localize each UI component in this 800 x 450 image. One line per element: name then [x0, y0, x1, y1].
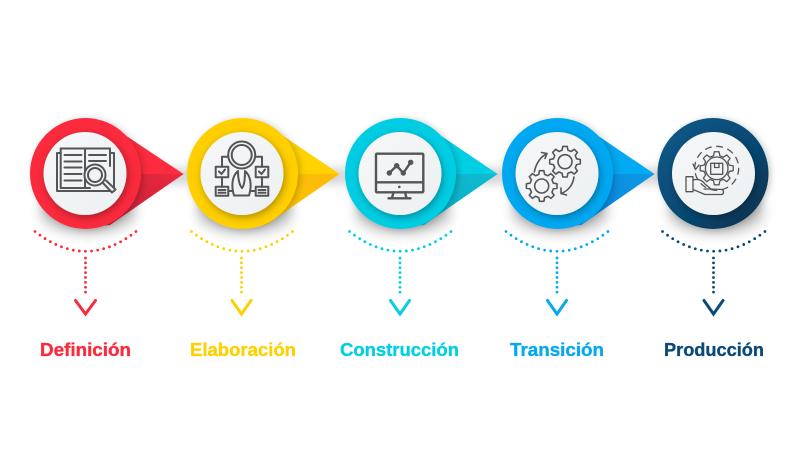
connector: Elaboración — [192, 232, 292, 314]
label: Construcción: Construcción — [340, 339, 459, 360]
soft shadows behind pins — [40, 170, 764, 234]
connector: Construcción — [350, 232, 451, 314]
pin 2: Elaboración — [187, 118, 340, 229]
pin 1: Definición — [30, 118, 184, 229]
label: Elaboración: Elaboración — [190, 339, 296, 360]
label: Transición: Transición — [510, 339, 604, 360]
connector: Transición — [506, 232, 608, 314]
pin 3: Construcción — [345, 118, 498, 229]
icon: analysis with magnifier — [216, 142, 268, 196]
pin 5: Producción — [658, 118, 768, 229]
pin 4: Transición — [502, 118, 654, 229]
connector: Definición — [35, 232, 136, 314]
label: Producción: Producción — [664, 339, 764, 360]
icon: book and magnifier — [57, 148, 116, 192]
icon: hand holding gear and box — [686, 146, 739, 194]
label: Definición: Definición — [40, 339, 131, 360]
icon: monitor with line chart — [376, 154, 423, 198]
icon: rotating gears — [526, 146, 580, 201]
connector: Producción — [662, 232, 765, 314]
